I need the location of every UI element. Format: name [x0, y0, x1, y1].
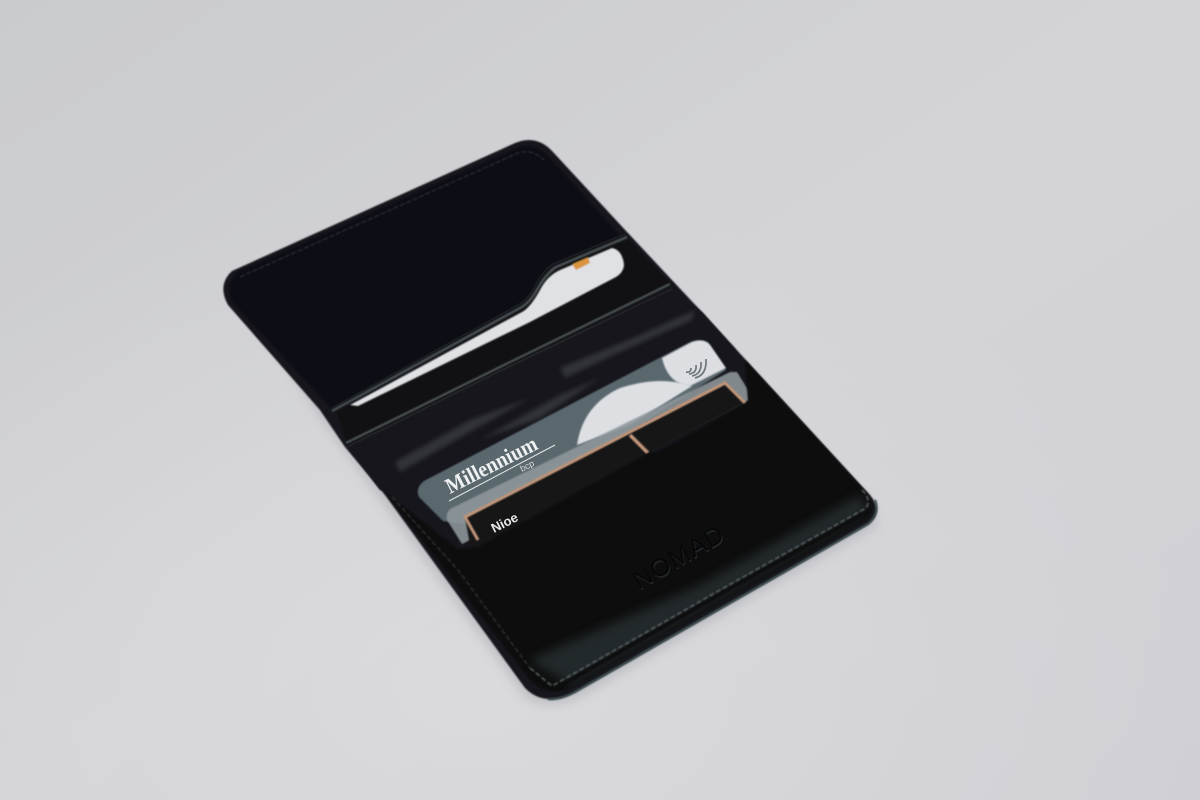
embossed logo highlight: NOMAD	[629, 522, 730, 596]
upper panel stitching	[240, 152, 544, 277]
logo underline	[449, 445, 555, 501]
dark card with copper edge	[465, 383, 745, 548]
embossed logo: NOMAD	[628, 520, 729, 595]
front panel glossy rim	[530, 495, 868, 685]
copper notch	[630, 435, 648, 453]
wallet body	[223, 140, 877, 699]
translucent card	[447, 372, 753, 544]
front panel stitching	[530, 490, 868, 686]
upper pocket band	[337, 238, 672, 445]
inner spine leather	[348, 289, 745, 548]
front panel dark welt	[555, 510, 870, 689]
front leather panel	[385, 360, 876, 699]
contactless waves	[686, 359, 706, 378]
upper leather panel	[229, 146, 622, 412]
card mark: Nioe	[489, 510, 520, 536]
card orange mark	[572, 257, 590, 270]
dark card face	[465, 383, 745, 548]
second pocket slit	[346, 284, 670, 443]
copper edge	[465, 383, 745, 540]
contactless corner	[662, 341, 726, 386]
pocket slit edge	[332, 237, 627, 411]
white card in upper pocket	[350, 248, 624, 406]
card face	[418, 340, 726, 525]
spine scuff highlights	[395, 310, 695, 472]
bank card	[418, 340, 726, 525]
front pocket face	[385, 360, 872, 691]
white arc	[577, 381, 692, 445]
logo: Millennium: Millennium	[441, 431, 541, 498]
logo: bcp: bcp	[518, 458, 536, 474]
teal outer edge	[548, 500, 876, 699]
wallet soft shadow	[232, 280, 878, 705]
front left stitching	[392, 497, 530, 668]
wallet	[223, 140, 877, 699]
